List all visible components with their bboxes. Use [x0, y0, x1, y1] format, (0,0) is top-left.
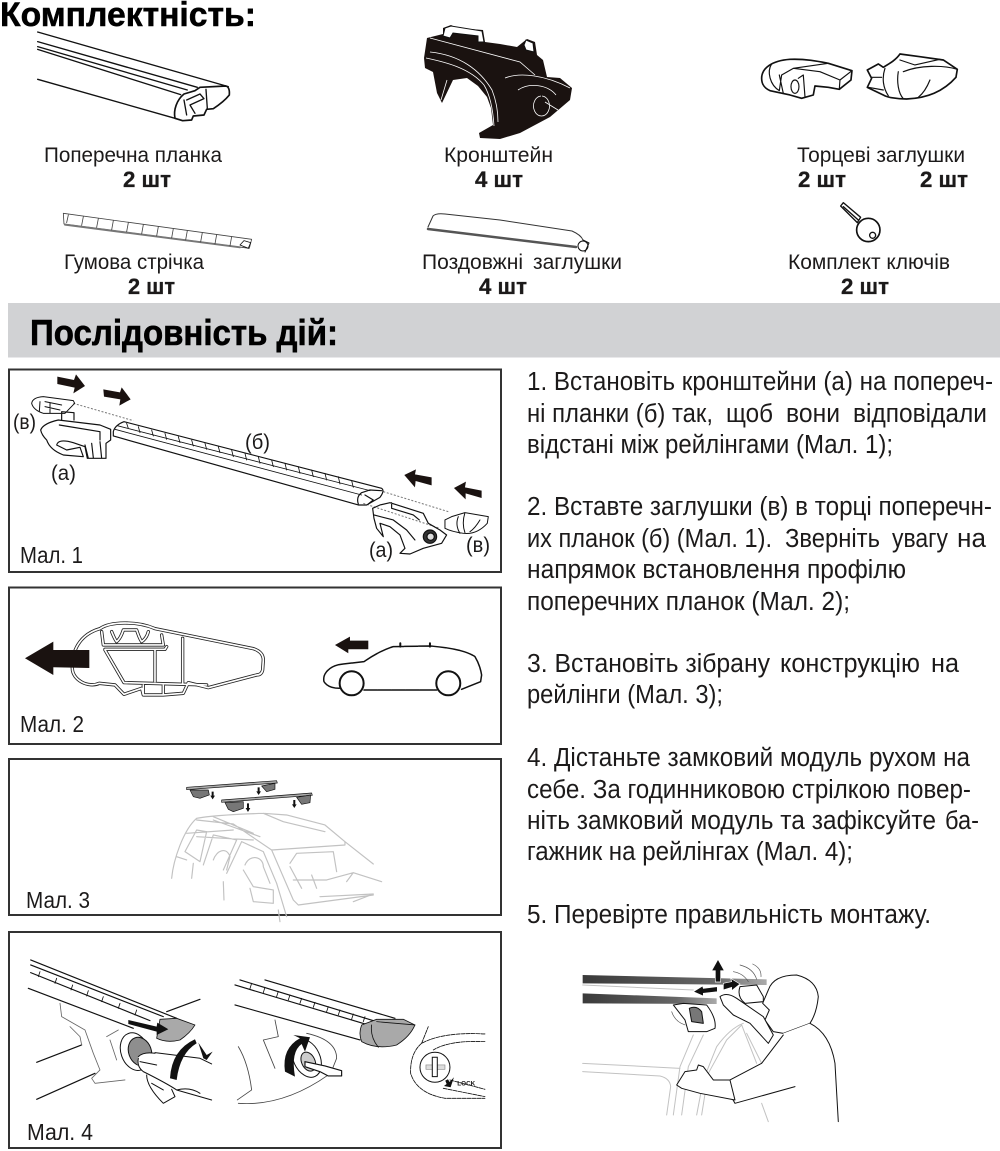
panel: figure 1	[9, 370, 501, 572]
text block: step 2: их планок (б) (Мал. 1).	[527, 525, 772, 553]
panel: figure 2	[9, 588, 501, 744]
icon: bracket	[424, 25, 572, 139]
roof bars with arrows	[187, 781, 312, 812]
icon: end caps	[762, 54, 957, 99]
text block: step 2	[527, 493, 992, 616]
text block: step 4: себе. За годинниковою стрілкою повер-	[527, 776, 971, 804]
roof bars	[583, 975, 767, 985]
text block: step 3	[527, 650, 960, 709]
car with roof rails	[172, 813, 382, 922]
label: (а) right: (а)	[369, 538, 393, 562]
text block: step 4: ба-	[945, 807, 979, 835]
caption: Мал. 4: Мал. 4	[27, 1119, 93, 1145]
text block: step 3: конструкцію	[780, 650, 920, 678]
arrow: large left	[25, 642, 89, 675]
text block: step 4: гажник на рейлінгах (Мал. 4);	[527, 838, 853, 866]
panel: figure 3	[9, 759, 501, 922]
text block: step 3: на	[931, 650, 960, 678]
label: longitudinal cover	[422, 251, 622, 299]
illustration: person adjusting rack	[583, 959, 838, 1122]
label: longitudinal cover: заглушки	[533, 251, 622, 274]
brackets	[672, 964, 763, 1032]
text block: step 2: Зверніть	[785, 525, 880, 553]
text block: step 1	[527, 368, 993, 459]
text block: step 1: ні планки (б) так,	[527, 400, 713, 428]
person	[677, 975, 838, 1122]
label: bracket: 4 шт	[475, 167, 523, 192]
text block: step 1: відстані між рейлінгами (Мал. 1);	[527, 431, 893, 459]
text block: step 4	[527, 744, 979, 866]
car side silhouette	[324, 643, 482, 695]
label: key set: Комплект ключів	[788, 251, 950, 274]
car outline	[583, 985, 768, 1122]
label: end caps	[797, 144, 968, 192]
text block: step 4: 4. Дістаньте замковий модуль рухом на	[527, 744, 971, 772]
text block: step 2: напрямок встановлення профілю	[527, 556, 906, 584]
label: end caps: 2 шт	[798, 167, 846, 192]
text block: step 3: 3. Встановіть зібрану	[527, 650, 770, 678]
label: (а) left: (а)	[51, 461, 76, 485]
text block: step 1: відповідали	[853, 400, 987, 428]
caption: Мал. 3: Мал. 3	[26, 887, 90, 913]
banner: sequence of actions	[8, 303, 1000, 358]
heading: sequence of actions: Послідовність дій:	[30, 312, 338, 353]
label: bracket: Кронштейн	[444, 144, 553, 167]
label: longitudinal cover: Поздовжні	[422, 251, 523, 274]
text block: step 2: поперечних планок (Мал. 2);	[527, 588, 850, 616]
caption: Мал. 2: Мал. 2	[20, 711, 84, 737]
caption: Мал. 1: Мал. 1	[20, 542, 83, 568]
label: key set: 2 шт	[841, 274, 889, 299]
icon: cross bar	[38, 32, 229, 121]
label: end caps: Торцеві заглушки	[797, 144, 965, 167]
text block: step 1: вони	[786, 400, 840, 428]
label: bracket	[444, 144, 553, 192]
arrow: small left	[335, 637, 368, 653]
label: (в) left: (в)	[13, 410, 36, 434]
label: rubber strip: 2 шт	[128, 274, 175, 299]
label: cross bar: 2 шт	[123, 167, 171, 192]
key turning in lock	[235, 980, 415, 1104]
bar profile cross-section	[72, 623, 263, 695]
label: (б): (б)	[245, 430, 270, 454]
text block: step 1: щоб	[726, 400, 773, 428]
icon: key	[841, 203, 880, 242]
label: (в) right: (в)	[466, 533, 490, 557]
text block: step 5: 5. Перевірте правильність монтажу.	[527, 901, 931, 929]
icon: rubber strip	[63, 213, 252, 248]
icon: longitudinal cover	[428, 214, 589, 252]
label: end caps: 2 шт	[920, 167, 968, 192]
lock cylinder detail	[411, 1027, 485, 1098]
hand unlocking module	[28, 960, 213, 1103]
label: rubber strip	[64, 251, 204, 299]
text block: step 2: увагу	[892, 525, 948, 553]
text block: step 2: на	[957, 525, 987, 553]
label: longitudinal cover: 4 шт	[479, 274, 527, 299]
label: rubber strip: Гумова стрічка	[64, 251, 204, 274]
label: key set	[788, 251, 950, 299]
figure 1 drawing	[32, 374, 488, 554]
label: cross bar: Поперечна планка	[44, 144, 222, 167]
text block: step 3: рейлінги (Мал. 3);	[527, 681, 723, 709]
label: cross bar	[44, 144, 222, 192]
lock cylinder detail: LOCK	[457, 1080, 476, 1087]
arrows	[693, 959, 740, 996]
panel: figure 4	[9, 932, 501, 1148]
text block: step 4: ніть замковий модуль та зафіксуйте	[527, 807, 936, 835]
